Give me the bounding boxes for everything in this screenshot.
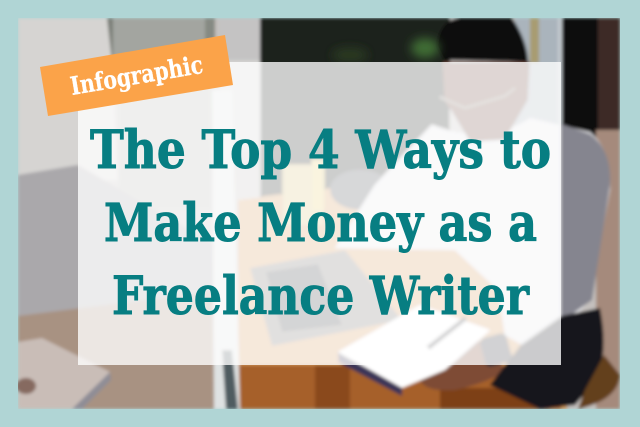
- orange infographic badge: [40, 35, 233, 116]
- title: Freelance Writer: [112, 266, 530, 327]
- table: [238, 180, 568, 409]
- watch: [479, 332, 513, 368]
- pants and stool: [490, 308, 604, 409]
- sweater: [335, 118, 610, 355]
- laptop: [250, 250, 402, 346]
- gray sleeve: [561, 124, 610, 322]
- background foliage: [332, 38, 439, 62]
- title: [90, 120, 551, 327]
- desk items: [283, 165, 323, 225]
- translucent title panel: [78, 62, 561, 365]
- title: Make Money as a: [104, 193, 537, 254]
- hand: [420, 342, 504, 392]
- window frame: [212, 90, 240, 409]
- pen: [428, 318, 466, 348]
- glasses: [440, 96, 448, 100]
- face and hair: [443, 62, 530, 142]
- title: The Top 4 Ways to: [90, 120, 551, 181]
- notebook: [338, 305, 490, 388]
- orange infographic badge: Infographic: [68, 50, 205, 101]
- left notebook: [18, 338, 110, 409]
